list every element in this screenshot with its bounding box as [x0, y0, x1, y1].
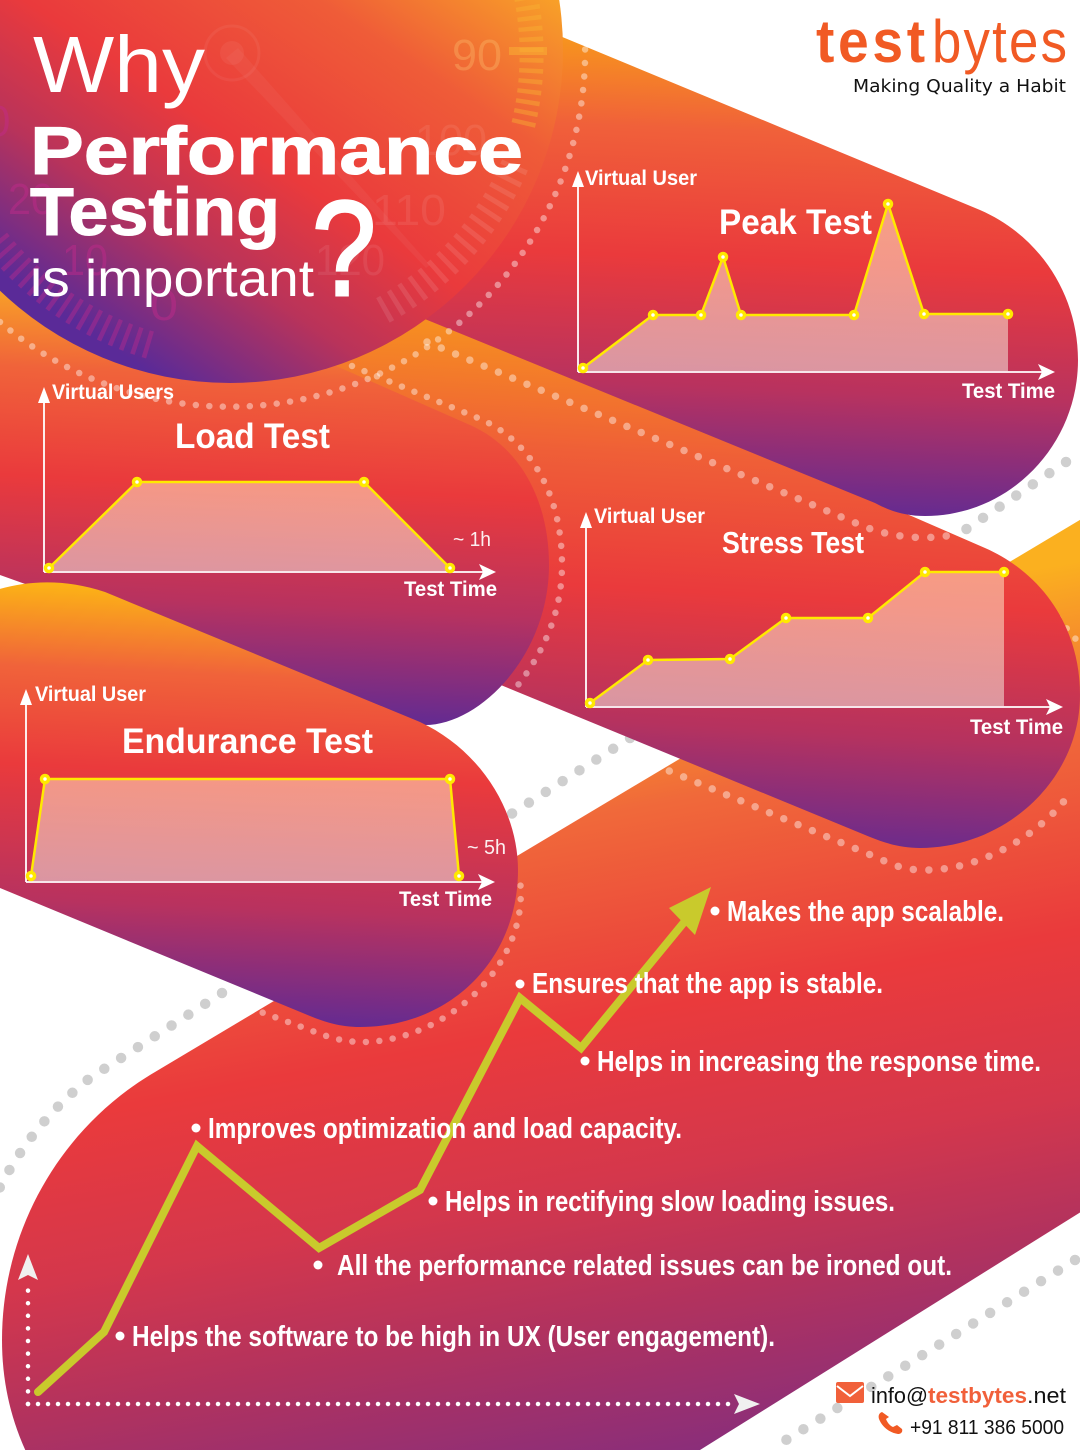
- icon: phone: [879, 1412, 902, 1434]
- gauge numbers left: 0: [150, 281, 178, 330]
- dotted outline right of stress panel: [1058, 618, 1080, 650]
- load labels: [52, 381, 497, 601]
- gauge numbers left: [0, 97, 178, 330]
- stress line: [590, 572, 1004, 703]
- grey dotted trail: bottom right: [770, 1260, 1075, 1450]
- grey dotted trail: centre: [505, 738, 630, 818]
- logo: bytes: [932, 8, 1069, 75]
- gauge numbers right: 110: [372, 186, 446, 235]
- endurance area: [31, 779, 459, 881]
- endurance labels: ~ 5h: [467, 837, 506, 859]
- gauge hub: [205, 26, 259, 80]
- gauge numbers right: [315, 31, 502, 285]
- load labels: Test Time: [404, 578, 497, 601]
- benefit bullets: Improves optimization and load capacity.: [208, 1113, 682, 1145]
- peak points: [580, 200, 1012, 372]
- benefit bullets: All the performance related issues can be ironed out.: [337, 1250, 952, 1282]
- title: is important: [30, 250, 315, 308]
- contact email: [871, 1383, 1066, 1408]
- peak axis arrowheads: [572, 171, 1055, 380]
- gauge major tick 90: [509, 47, 547, 55]
- endurance labels: Virtual User: [35, 683, 146, 706]
- title: ?: [312, 173, 376, 324]
- benefit bullets: Helps the software to be high in UX (User engagement).: [132, 1321, 775, 1353]
- stress labels: Test Time: [970, 716, 1063, 739]
- grey dotted trail: lower left: [0, 993, 222, 1195]
- stress labels: [594, 505, 1063, 739]
- peak line: [583, 204, 1008, 368]
- load axes: [44, 396, 486, 572]
- load line: [49, 482, 450, 568]
- growth arrow line: [38, 887, 711, 1392]
- benefit bullets: Helps in rectifying slow loading issues.: [445, 1186, 895, 1218]
- vertical axis arrowhead: [18, 1254, 38, 1280]
- horizontal axis arrowhead: [734, 1394, 760, 1414]
- contact email: .net: [1027, 1383, 1066, 1408]
- peak labels: [585, 167, 1055, 403]
- gauge numbers right: 120: [315, 236, 385, 285]
- dotted outline below stress panel: [655, 765, 1072, 870]
- gauge ticks left: [0, 240, 150, 345]
- panel: load test: [0, 200, 549, 725]
- benefit bullets: [116, 896, 1041, 1353]
- endurance line: [31, 779, 459, 876]
- endurance labels: Endurance Test: [122, 722, 373, 761]
- peak labels: Peak Test: [719, 203, 872, 242]
- panel: peak test: [300, 0, 1078, 516]
- peak labels: Test Time: [962, 380, 1055, 403]
- dotted outline along peak panel: [427, 342, 952, 538]
- dotted outline around gauge: [0, 42, 585, 407]
- benefit bullets: Makes the app scalable.: [727, 896, 1004, 928]
- title: Performance: [30, 113, 523, 189]
- endurance labels: Test Time: [399, 888, 492, 911]
- panel: stress test: [100, 250, 1080, 848]
- contact phone: +91 811 386 5000: [910, 1417, 1064, 1439]
- stress axis arrowheads: [580, 512, 1063, 715]
- panel: endurance test: [0, 582, 518, 1027]
- load labels: Load Test: [175, 417, 330, 456]
- contact email: testbytes: [928, 1383, 1027, 1408]
- gauge numbers right: 90: [452, 31, 502, 80]
- load area: [49, 482, 450, 571]
- load axis arrowheads: [38, 387, 496, 580]
- logo: [816, 8, 1069, 97]
- title: Why: [33, 20, 205, 109]
- logo: Making Quality a Habit: [853, 76, 1066, 97]
- peak area: [583, 204, 1008, 371]
- load points: [46, 478, 454, 572]
- title: Testing: [30, 174, 280, 250]
- dotted outline around endurance panel: [250, 880, 521, 1042]
- icon: envelope: [836, 1382, 864, 1403]
- peak axes: [578, 180, 1045, 372]
- load labels: ~ 1h: [453, 529, 491, 551]
- endurance points: [28, 776, 462, 880]
- endurance axes: [26, 698, 484, 882]
- peak labels: Virtual User: [585, 167, 697, 190]
- endurance labels: [35, 683, 506, 911]
- gauge ticks lower right: [380, 165, 515, 312]
- dotted horizontal axis: [28, 1402, 732, 1406]
- endurance axis arrowheads: [20, 689, 495, 890]
- gauge numbers left: 10: [62, 236, 108, 285]
- gauge numbers left: 20: [8, 175, 54, 224]
- dotted vertical axis: [26, 1280, 30, 1404]
- logo: test: [816, 9, 929, 76]
- stress area: [590, 572, 1004, 706]
- stress labels: Stress Test: [722, 525, 864, 560]
- panel: gauge circle: [0, 0, 563, 383]
- gauge numbers right: 100: [415, 116, 487, 165]
- load labels: Virtual Users: [52, 381, 174, 404]
- stress axes: [586, 520, 1052, 707]
- gauge needle: [226, 48, 430, 268]
- title: [30, 20, 523, 324]
- contact email: info@: [871, 1383, 928, 1408]
- benefit bullets: Ensures that the app is stable.: [532, 968, 883, 1000]
- stress labels: Virtual User: [594, 505, 705, 528]
- panel: benefits band: [2, 508, 1080, 1450]
- gauge ticks right: [521, 0, 532, 130]
- dotted outline around load panel: [352, 366, 562, 685]
- stress points: [586, 568, 1008, 706]
- grey dotted trail: top right: [962, 462, 1066, 532]
